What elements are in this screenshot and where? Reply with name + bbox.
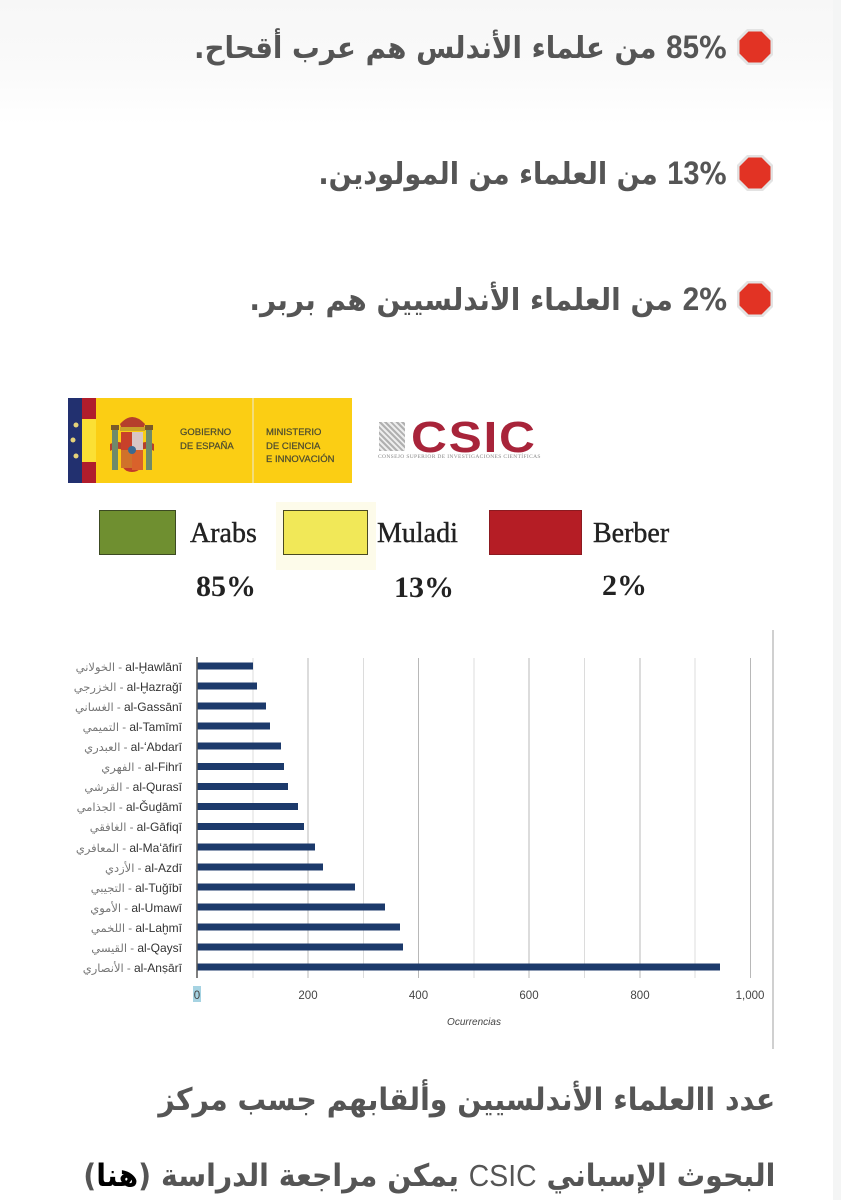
logo text right: MINISTERIO: [266, 427, 321, 438]
bar chart: [74, 630, 774, 1049]
top shaded background: [0, 0, 833, 125]
category labels: الأنصاري - al-Anṣārī: [83, 961, 183, 976]
label: Arabs: [190, 518, 257, 549]
swatch: [283, 510, 368, 555]
category labels: التميمي - al-Tamīmī: [83, 720, 183, 734]
swatch: [489, 510, 582, 555]
caption line 1: عدد االعلماء الأندلسيين وألقابهم جسب مركز: [158, 1082, 775, 1118]
legend: Berber: [489, 510, 670, 602]
category labels: الغافقي - al-Gāfiqī: [90, 820, 183, 834]
bullet text: 13% من العلماء من المولودين.: [319, 155, 727, 192]
icon: red stop sign: [737, 155, 773, 191]
logo: Gobierno de España: DE ESPAÑA: [180, 441, 234, 452]
icon: red stop sign: [737, 281, 773, 317]
bullet text: 2% من العلماء الأندلسيين هم بربر.: [249, 281, 727, 318]
percent: 85%: [196, 570, 256, 603]
bullet: 2 percent Berber: [249, 281, 773, 318]
axis tick labels: 1,000: [736, 990, 764, 1002]
axis tick labels: [194, 990, 764, 1002]
axis tick labels: 200: [298, 990, 318, 1002]
bars: [197, 662, 720, 970]
bullet text: 85% من علماء الأندلس هم عرب أقحاح.: [194, 29, 727, 66]
bullet: 85 percent Arabs: [194, 28, 773, 66]
grid lines: [253, 658, 750, 978]
swatch: [99, 510, 176, 555]
caption: [83, 1079, 775, 1194]
swatch halo: [276, 502, 376, 570]
percent: 2%: [602, 569, 647, 602]
axis line: [196, 657, 198, 978]
axis tick labels: 0: [194, 990, 200, 1002]
logo: Gobierno de España: E INNOVACIÓN: [266, 454, 335, 465]
axis tick labels: 600: [519, 990, 539, 1002]
category labels: التجيبي - al-Tuǧībī: [91, 881, 183, 895]
category labels: الغساني - al-Gassānī: [75, 700, 183, 714]
bullet: 13 percent Muladi: [319, 155, 773, 192]
category labels: الأموي - al-Umawī: [90, 901, 183, 916]
CSIC emblem: [379, 422, 405, 451]
category labels: الأزدي - al-Azdī: [105, 861, 183, 876]
caption line 2: البحوث الإسباني CSIC يمكن مراجعة الدراسة (هنا): [83, 1158, 775, 1194]
category labels: اللخمي - al-Laḫmī: [91, 921, 183, 935]
right side strip: [833, 0, 841, 1200]
category labels: الجذامي - al-Ǧuḏāmī: [77, 799, 183, 814]
logo: Gobierno de España: [68, 398, 352, 483]
right border line: [772, 630, 774, 1049]
category labels: العبدري - al-ʻAbdarī: [84, 740, 183, 755]
legend: Muladi: [276, 502, 458, 604]
category labels: الخزرجي - al-Ḫazraǧī: [74, 680, 183, 695]
category labels: القرشي - al-Qurasī: [84, 780, 183, 795]
category labels: [74, 660, 183, 976]
label: Muladi: [377, 518, 458, 549]
category labels: القيسي - al-Qaysī: [91, 941, 183, 955]
CSIC subtitle: CONSEJO SUPERIOR DE INVESTIGACIONES CIENTÍFICAS: [378, 454, 541, 460]
category labels: الفهري - al-Fihrī: [101, 760, 183, 775]
axis tick labels: 400: [409, 990, 428, 1002]
coat of arms: [110, 417, 154, 472]
highlight on zero label: [193, 986, 201, 1002]
logo: CSIC: [378, 413, 541, 462]
category labels: الخولاني - al-Ḫawlānī: [76, 660, 183, 675]
icon: red stop sign: [737, 29, 773, 65]
logo: Gobierno de España: DE CIENCIA: [266, 441, 321, 452]
label: Berber: [593, 518, 669, 549]
CSIC wordmark: CSIC: [411, 413, 537, 462]
percent: 13%: [394, 571, 454, 604]
legend: Arabs: [99, 510, 257, 603]
logo text left: GOBIERNO: [180, 427, 231, 438]
axis title: Ocurrencias: [447, 1017, 501, 1028]
axis tick labels: 800: [630, 990, 650, 1002]
category labels: المعافري - al-Maʻāfirī: [76, 841, 183, 856]
